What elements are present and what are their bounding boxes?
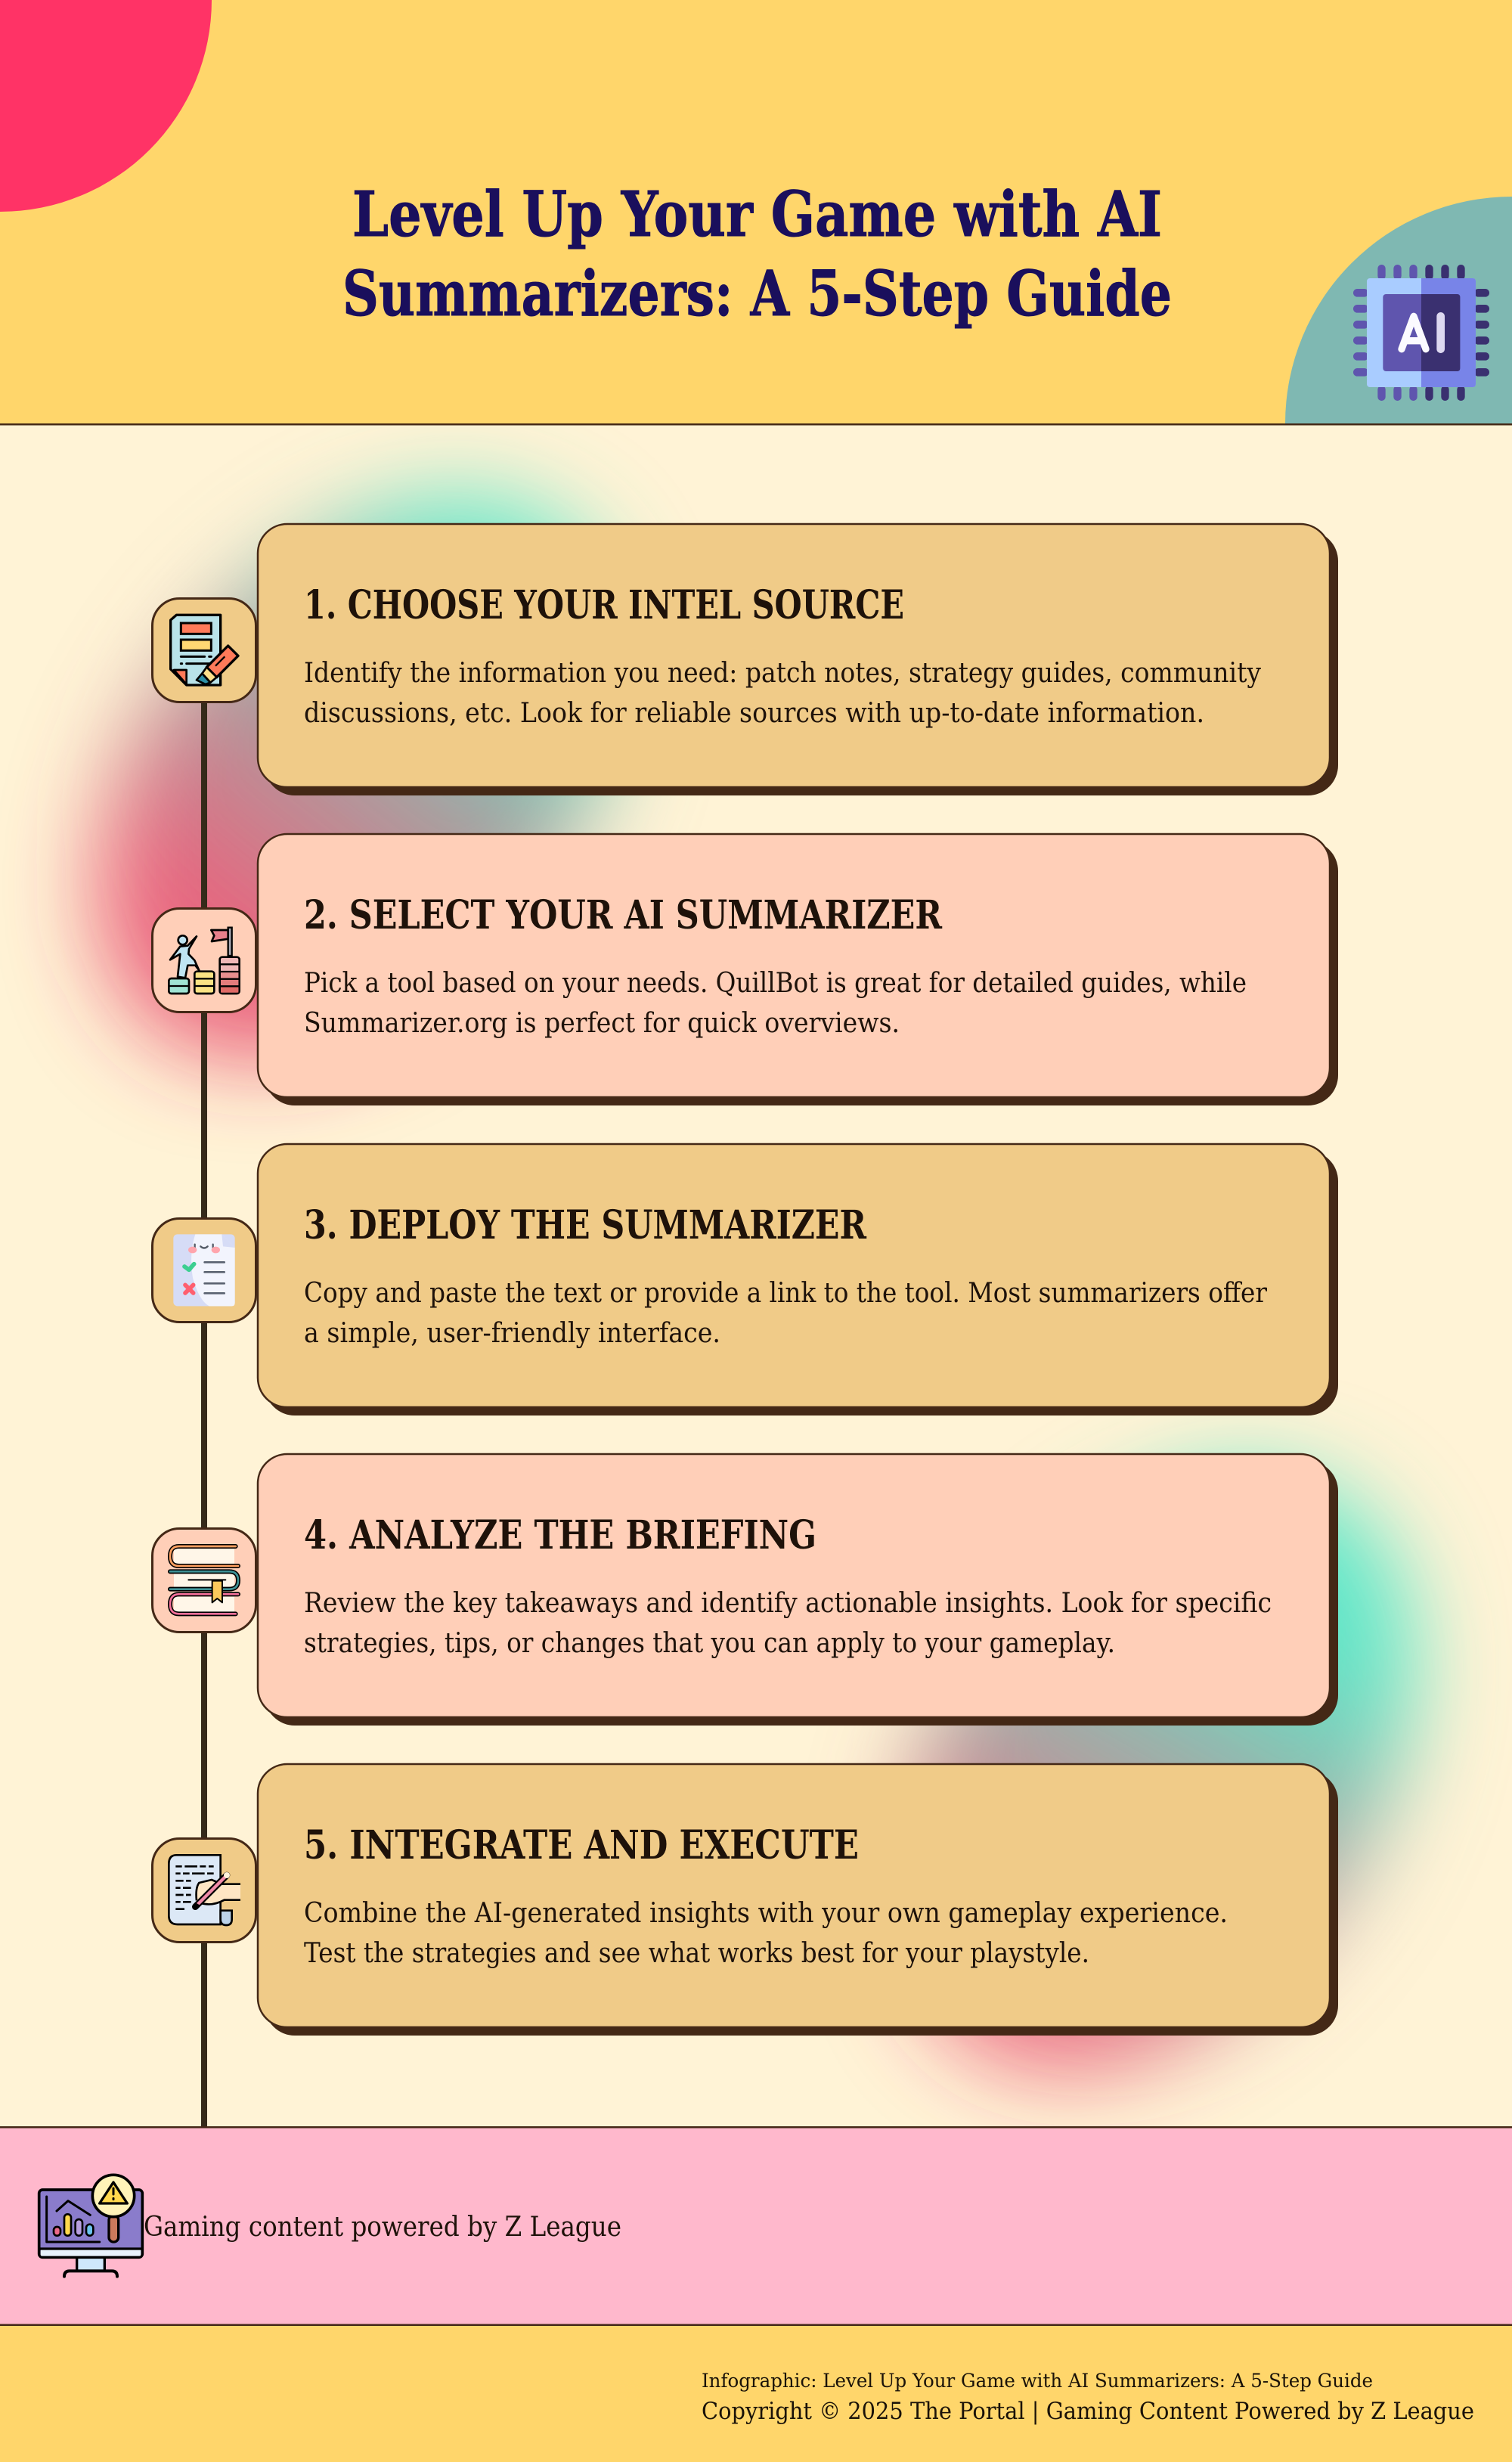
step 1 card	[258, 524, 1338, 795]
step 5 card	[258, 1764, 1338, 2036]
step 4 body: Review the key takeaways and identify actionable insights. Look for specific	[304, 1588, 1272, 1619]
bottom footer	[0, 2326, 1512, 2462]
icon: AI chip	[1353, 265, 1489, 401]
step 2 card	[258, 834, 1338, 1105]
decorative red circle	[0, 0, 212, 212]
step 3 body	[304, 1278, 1268, 1349]
decorative blurred blobs	[26, 432, 1482, 2126]
icon: monitor with warning magnifier	[39, 2175, 142, 2277]
step 4 body	[304, 1588, 1272, 1659]
timeline line	[201, 699, 207, 2126]
step 5 body: Test the strategies and see what works best for your playstyle.	[304, 1938, 1089, 1969]
step 3 body: a simple, user-friendly interface.	[304, 1318, 720, 1349]
step 2 heading: 2. SELECT YOUR AI SUMMARIZER	[304, 892, 943, 938]
decorative teal circle	[1285, 197, 1512, 423]
step 2 body: Pick a tool based on your needs. QuillBot is great for detailed guides, while	[304, 968, 1247, 999]
step 4 icon	[153, 1529, 256, 1632]
step 3 icon	[153, 1219, 256, 1322]
step 5 heading: 5. INTEGRATE AND EXECUTE	[304, 1822, 859, 1868]
infographic caption: Infographic: Level Up Your Game with AI Summarizers: A 5-Step Guide	[702, 2370, 1373, 2392]
title	[342, 178, 1172, 330]
header band	[0, 0, 1512, 423]
step 4 heading: 4. ANALYZE THE BRIEFING	[304, 1512, 816, 1558]
step 4 card	[258, 1454, 1338, 1726]
step 5 body: Combine the AI-generated insights with your own gameplay experience.	[304, 1898, 1228, 1929]
header border	[0, 423, 1512, 425]
step 1 body: discussions, etc. Look for reliable sources with up-to-date information.	[304, 698, 1204, 729]
step 2 body: Summarizer.org is perfect for quick overviews.	[304, 1008, 900, 1039]
step 5 body	[304, 1898, 1228, 1969]
step 4 body: strategies, tips, or changes that you can apply to your gameplay.	[304, 1628, 1115, 1659]
copyright: Copyright © 2025 The Portal | Gaming Content Powered by Z League	[702, 2398, 1474, 2425]
title: Summarizers: A 5-Step Guide	[342, 258, 1172, 330]
footer banner text: Gaming content powered by Z League	[144, 2212, 621, 2243]
step 1 body: Identify the information you need: patch notes, strategy guides, community	[304, 658, 1262, 689]
step 3 heading: 3. DEPLOY THE SUMMARIZER	[304, 1202, 867, 1248]
step 1 icon	[153, 599, 256, 702]
step 2 icon	[153, 909, 256, 1012]
main background	[0, 425, 1512, 2126]
step 3 card	[258, 1144, 1338, 1415]
step 1 heading: 1. CHOOSE YOUR INTEL SOURCE	[304, 582, 904, 628]
step 1 body	[304, 658, 1262, 729]
step 2 body	[304, 968, 1247, 1039]
step 3 body: Copy and paste the text or provide a link to the tool. Most summarizers offer	[304, 1278, 1268, 1309]
step 5 icon	[153, 1839, 256, 1942]
footer banner	[0, 2126, 1512, 2326]
title: Level Up Your Game with AI	[352, 178, 1162, 251]
